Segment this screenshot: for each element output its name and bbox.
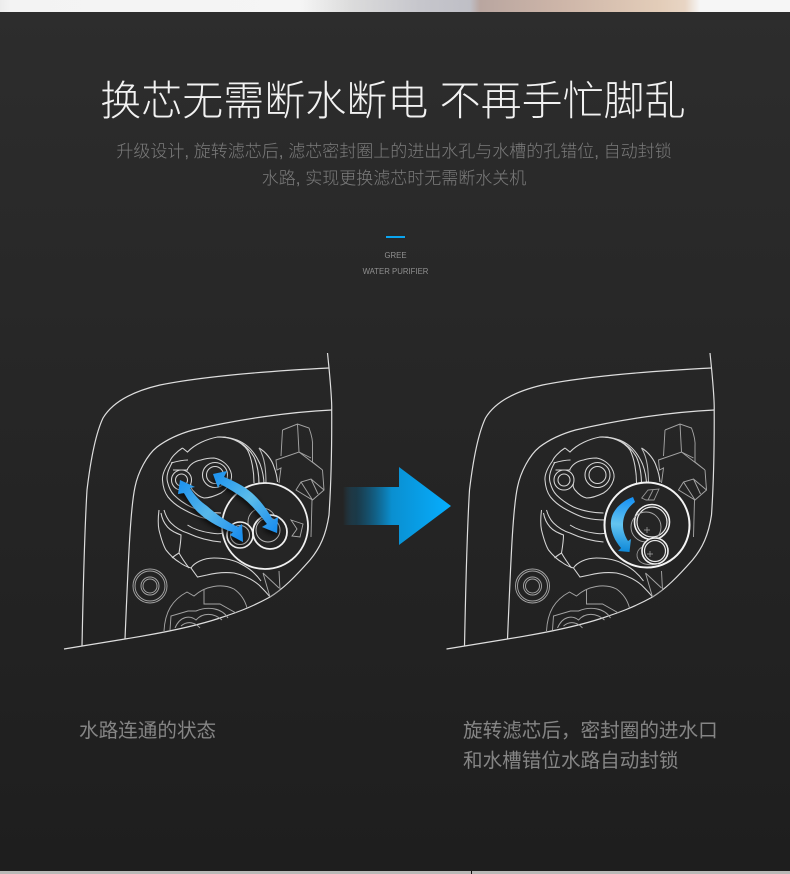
zoom circle: [604, 482, 690, 568]
caption: left: 水路连通的状态: [79, 720, 216, 742]
subtitle text: 水路, 实现更换滤芯时无需断水关机: [262, 169, 526, 188]
zoom circle: [222, 483, 308, 569]
caption: right: 旋转滤芯后，密封圈的进水口: [463, 720, 718, 742]
top photo strip: [0, 0, 790, 12]
subtitle text: 升级设计, 旋转滤芯后, 滤芯密封圈上的进出水孔与水槽的孔错位, 自动封锁: [116, 142, 672, 161]
title: 换芯无需断水断电 不再手忙脚乱: [100, 78, 686, 124]
left diagram: connected water path: [64, 353, 332, 649]
bottom strip: [0, 871, 790, 874]
right diagram: water path locked: [446, 353, 714, 649]
subtitle text: [116, 142, 672, 188]
brand label: [362, 251, 428, 276]
rotation arrow: [611, 497, 635, 552]
caption: right: 和水槽错位水路自动封锁: [463, 750, 679, 772]
brand label: GREE: [384, 251, 407, 260]
right arrow: [343, 467, 451, 545]
double arrow: lower left channel: [178, 480, 243, 542]
accent dash: [386, 236, 405, 238]
double arrow: upper right channel: [213, 471, 278, 533]
brand label: WATER PURIFIER: [363, 267, 428, 276]
caption: right: [463, 720, 718, 772]
